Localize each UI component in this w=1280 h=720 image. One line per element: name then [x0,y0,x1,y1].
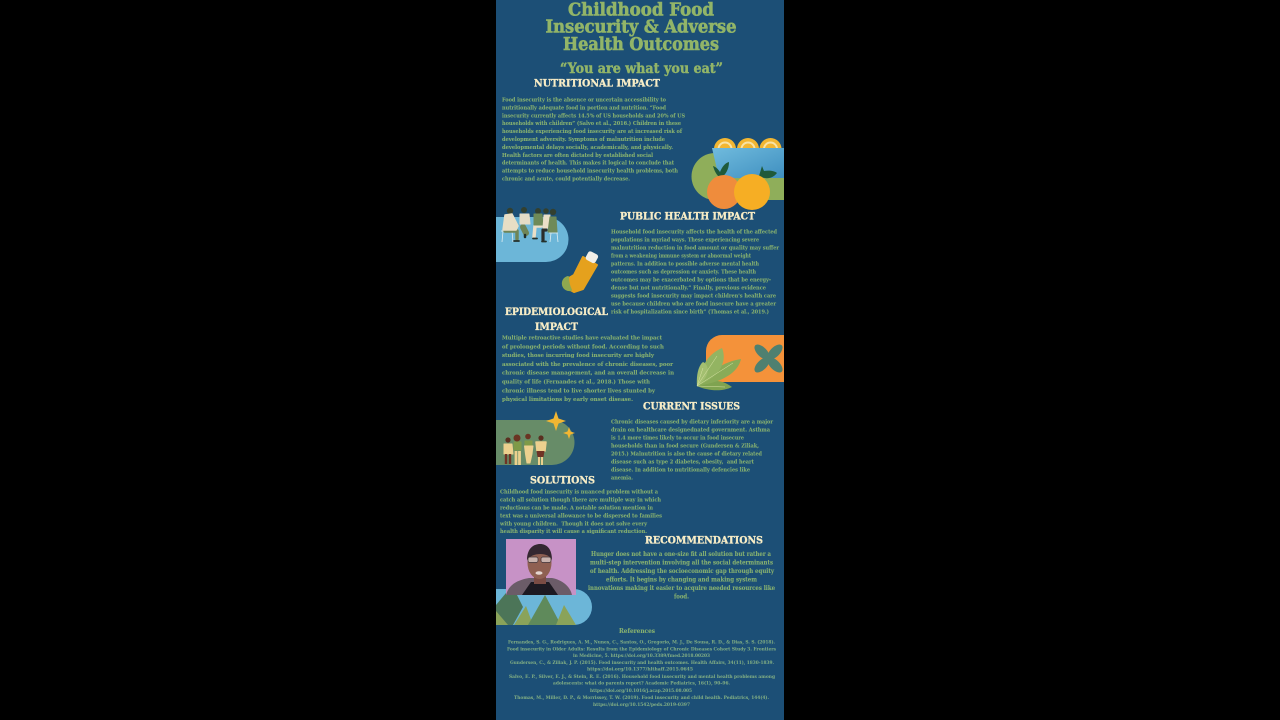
text block: current issues: anemia. [611,475,633,481]
text block: solutions [499,490,662,535]
text block: nutritional impact [502,98,685,182]
text block: public health impact: Household food insecurity affects the health of the affected [611,230,777,236]
heading: epidemiological impact: EPIDEMIOLOGICAL [505,307,608,318]
poster background [496,0,784,720]
text block: epidemiological impact: quality of life (Fernandes et al., 2018.) Those with [502,378,650,386]
icon: inhaler [563,250,599,292]
text block: current issues: is 1.4 more times likely to occur in food insecure [611,436,744,442]
text block: references: Salvo, E. P., Silver, E. J., & Stein, R. E. (2016). Household food insecurity and mental health problems among [509,673,775,680]
text block: nutritional impact: Food insecurity is the absence or uncertain accessibility to [502,98,666,104]
text block: public health impact: malnutrition reduction in food amount or quality may suffer [611,246,780,252]
text block: solutions: Childhood food insecurity is nuanced problem without a [500,490,658,496]
text block: references: Fernandes, S. G., Rodrigues, A. M., Nunes, C., Santos, O., Gregorio, M. J., De Sousa, R. D., & Dias, S. S. (2018). [508,638,775,646]
text block: current issues: households than in food secure (Gundersen & Ziliak, [611,443,759,450]
icon: fruit bowl [692,138,784,210]
text block: nutritional impact: developmental delays socially, academically, and physically. [502,145,673,151]
text block: public health impact: patterns. In addition to possible adverse mental health [611,262,759,268]
text block: solutions: with young children. Though it does not solve every [499,521,648,527]
text block: epidemiological impact: associated with the prevalence of chronic diseases, poor [502,362,674,368]
text block: references: adolescents: what do parents report? Academic Pediatrics, 16(1), 90–96. [553,680,730,687]
text block: references: https://doi.org/10.1377/hlthaff.2015.0645 [587,667,693,673]
text block: epidemiological impact: of prolonged periods without food. According to such [502,344,664,350]
text block: epidemiological impact: chronic illness tend to live shorter lives stunted by [502,388,656,394]
text block: epidemiological impact: studies, those incurring food insecurity are highly [502,353,655,359]
heading: epidemiological impact: IMPACT [535,322,579,333]
text block: nutritional impact: chronic and acute, could potentially decrease. [502,176,630,182]
portrait photo [506,539,576,595]
text block: current issues: drain on healthcare designednated government. Asthma [611,428,770,434]
icon: group of people seated [496,207,568,262]
text block: current issues: disease such as type 2 diabetes, obesity, and heart [611,459,754,465]
text block: nutritional impact: insecurity currently affects 14.5% of US households and 20% of US [502,113,685,119]
heading: nutritional impact: NUTRITIONAL IMPACT [534,78,661,90]
text block: public health impact: use because children who are food insecure have a greater [611,302,777,308]
text block: recommendations: multi-step intervention involving all the social determinants [590,560,774,567]
text block: solutions: text was a universal allowance to be dispersed to families [500,513,662,519]
icon: orange panel with leaf and flower [697,335,785,390]
title: Health Outcomes [563,34,719,55]
text block: references: https://doi.org/10.1016/j.acap.2015.08.005 [590,688,692,694]
subtitle quote: “You are what you eat” [560,61,723,77]
heading: epidemiological impact [505,307,608,333]
text block: references [507,638,776,708]
text block: recommendations [588,551,775,601]
text block: public health impact: from a weakening immune system or abnormal weight [611,254,751,260]
text block: solutions: reductions can be made. A notable solution mention in [500,506,653,512]
text block: recommendations: of health. Addressing the socioeconomic gap through equity [590,568,774,575]
title: Insecurity & Adverse [546,17,736,38]
text block: public health impact: populations in myriad ways. These experiencing severe [611,238,759,244]
title [546,0,736,55]
text block: public health impact: suggests food insecurity may impact children's health care [611,294,776,300]
text block: nutritional impact: households with children” (Salvo et al., 2016.) Children in these [502,120,681,127]
heading: solutions: SOLUTIONS [530,476,595,486]
text block: public health impact: risk of hospitalization since birth” (Thomas et al., 2019.) [611,309,769,316]
text block: nutritional impact: attempts to reduce household insecurity health problems, both [502,169,678,175]
text block: recommendations: efforts. It begins by changing and making system [606,577,757,584]
heading: public health impact: PUBLIC HEALTH IMPACT [620,212,756,222]
text block: public health impact: outcomes such as depression or anxiety. These health [611,270,756,276]
heading: recommendations: RECOMMENDATIONS [645,536,763,546]
text block: public health impact: outcomes may be exacerbated by options that be energy- [611,278,772,284]
text block: public health impact: dense but not nutritionally.” Finally, previous evidence [611,286,766,292]
text block: nutritional impact: nutritionally adequate food in portion and nutrition. “Food [502,104,666,111]
text block: recommendations: food. [674,594,689,601]
text block: references: Gundersen, C., & Ziliak, J. P. (2015). Food insecurity and health outcomes. Health Affairs, 34(11), 1830-1839. [510,659,774,666]
icon: mountains panel [496,589,592,625]
text block: epidemiological impact [502,336,674,403]
text block: nutritional impact: Health factors are often dictated by established social [502,153,654,159]
text block: recommendations: Hunger does not have a one-size fit all solution but rather a [591,551,771,558]
text block: recommendations: innovations making it easier to acquire needed resources like [588,585,775,592]
text block: current issues: disease. In addition to nutritionally defencies like [611,467,750,473]
heading: references: References [619,628,656,635]
text block: nutritional impact: households experiencing food insecurity are at increased risk of [502,129,682,135]
text block: references: in Medicine, 5. https://doi.org/10.3389/fmed.2018.00203 [573,653,710,659]
text block: current issues: 2015.) Malnutrition is also the cause of dietary related [611,450,762,458]
text block: references: Food insecurity in Older Adults: Results from the Epidemiology of Chronic Diseases Cohort Study 3. Frontiers [507,646,776,652]
text block: nutritional impact: determinants of health. This makes it logical to conclude that [502,161,674,167]
text block: epidemiological impact: chronic disease management, and an overall decrease in [502,371,674,377]
text block: references: Thomas, M., Miller, D. P., & Morrissey, T. W. (2019). Food insecurity and child health. Pediatrics, 144(4). [514,694,769,701]
text block: solutions: health disparity it will cause a significant reduction. [500,529,647,535]
icon: family walking with stars [496,411,575,465]
text block: current issues [611,420,774,481]
text block: solutions: catch all solution though there are multiple way in which [500,498,661,504]
text block: nutritional impact: development adversity. Symptoms of malnutrition include [502,137,665,143]
text block: epidemiological impact: Multiple retroactive studies have evaluated the impact [502,336,662,342]
text block: public health impact [611,230,780,316]
text block: epidemiological impact: physical limitations by early onset disease. [502,397,633,403]
text block: references: https://doi.org/10.1542/peds.2019-0397 [593,702,690,708]
text block: current issues: Chronic diseases caused by dietary inferiority are a major [611,420,774,426]
heading: current issues: CURRENT ISSUES [643,402,740,412]
title: Childhood Food [568,0,715,21]
